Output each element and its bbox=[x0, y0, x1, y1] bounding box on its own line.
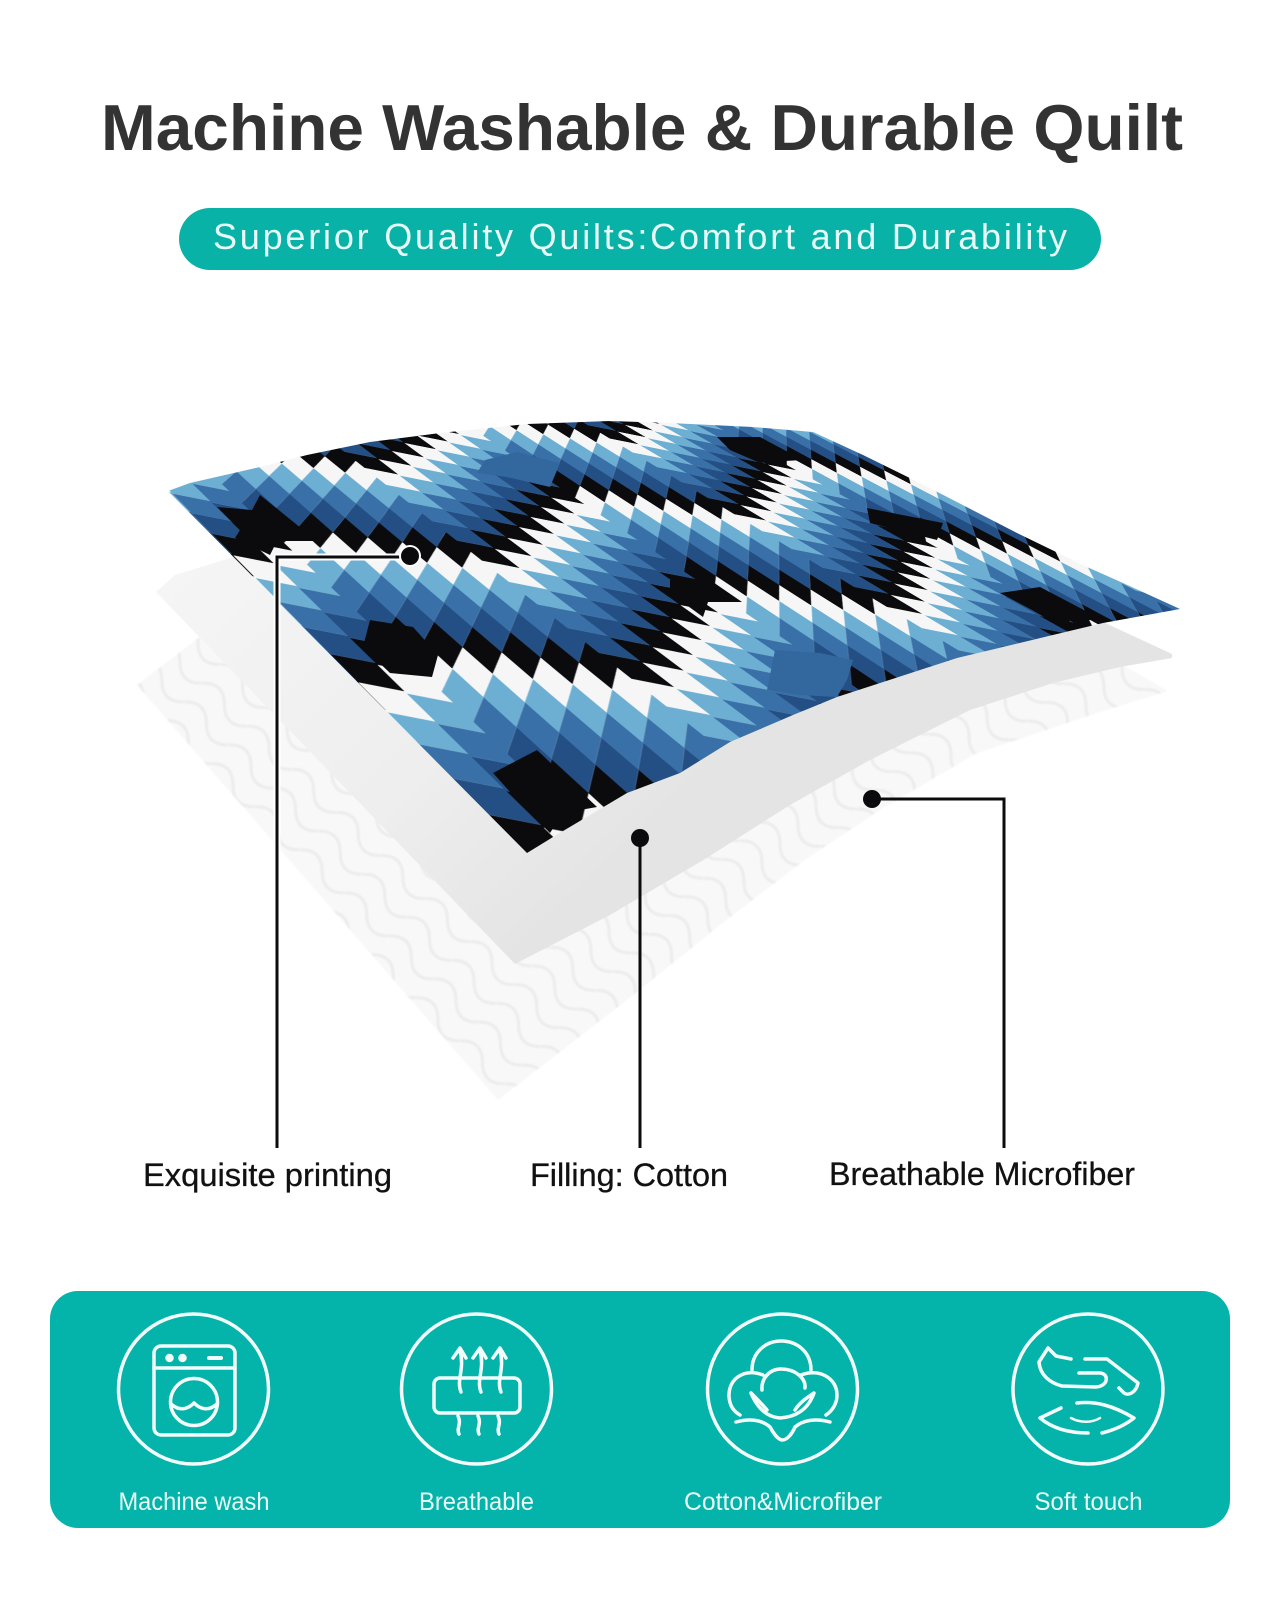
callout: breathable microfiber: Breathable Microfiber bbox=[829, 1156, 1135, 1192]
feature: machine wash bbox=[118, 1314, 270, 1516]
callout: filling cotton: Filling: Cotton bbox=[530, 1157, 728, 1193]
feature: breathable: Breathable bbox=[419, 1488, 534, 1516]
feature panel bbox=[50, 1291, 1230, 1528]
subtitle pill bbox=[179, 208, 1101, 270]
feature: breathable bbox=[402, 1314, 552, 1516]
feature: machine wash: Machine wash bbox=[118, 1488, 270, 1516]
title: Machine Washable & Durable Quilt bbox=[101, 91, 1183, 164]
quilt layer: cotton filling bbox=[156, 555, 1172, 964]
feature: cotton and microfiber: Cotton&Microfiber bbox=[684, 1488, 882, 1516]
callout: breathable microfiber bbox=[829, 790, 1135, 1192]
callout: exquisite printing bbox=[143, 545, 421, 1193]
quilt layer: printed top fabric bbox=[168, 421, 1180, 853]
feature: soft touch: Soft touch bbox=[1034, 1488, 1142, 1516]
callout: exquisite printing: Exquisite printing bbox=[143, 1157, 392, 1193]
subtitle pill: Superior Quality Quilts:Comfort and Durability bbox=[213, 216, 1067, 257]
quilt layer: microfiber backing bbox=[137, 560, 1168, 1100]
feature: cotton and microfiber bbox=[684, 1314, 882, 1516]
callout: filling cotton bbox=[530, 829, 728, 1193]
feature: soft touch bbox=[1013, 1314, 1163, 1516]
